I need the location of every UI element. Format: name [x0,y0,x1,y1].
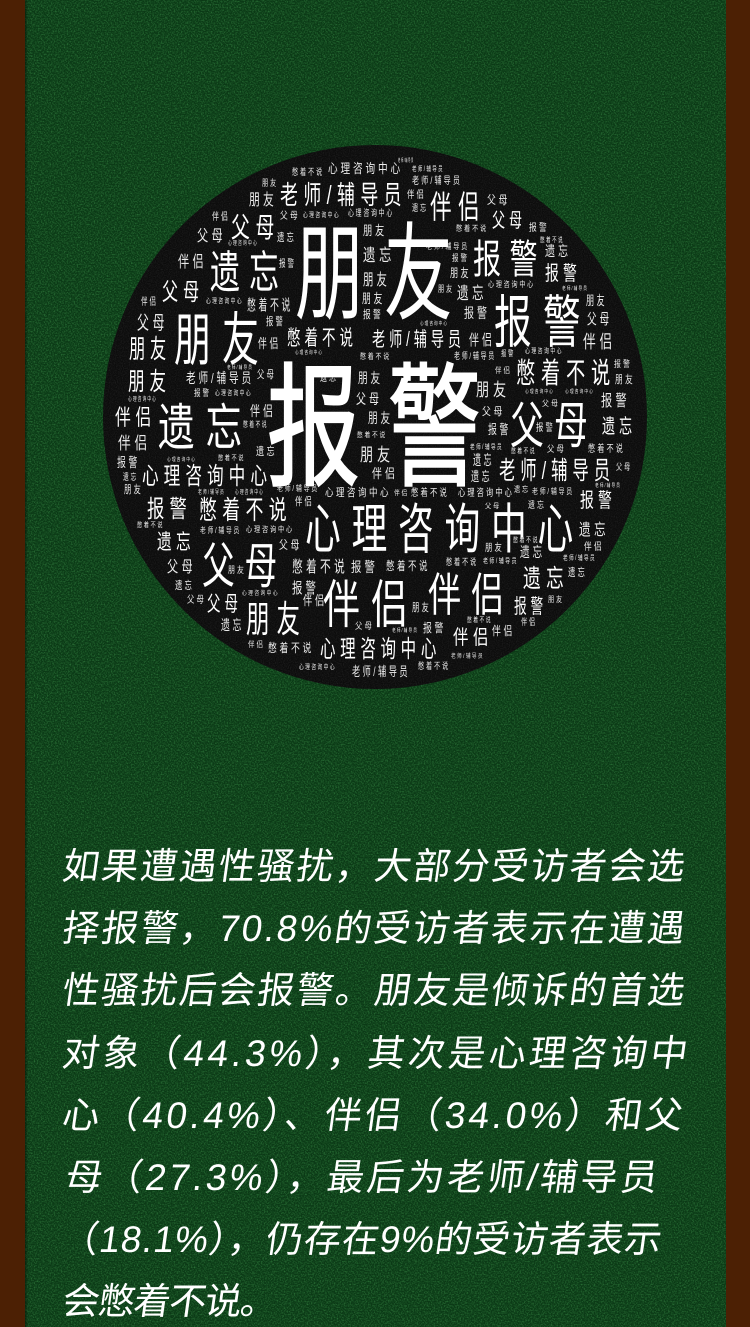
small words: 父母 [280,210,300,222]
small words: 心理咨询中心 [206,296,243,305]
medium words: 憋着不说 [516,357,616,390]
small words: 憋着不说 [218,453,245,462]
small words: 遗忘 [545,243,571,259]
small words: 憋着不说 [137,520,164,529]
small words: 父母 [587,311,612,328]
line 1: 如果遭遇性骚扰，大部分受访者会选 [60,845,688,887]
small words [117,157,635,679]
medium words: 朋友 [129,334,171,364]
small words: 报警 [423,620,446,635]
medium words: 老师/辅导员 [280,180,407,210]
small words: 老师/辅导员 [470,442,503,451]
small words: 憋着不说 [418,660,450,671]
small words: 报警 [464,305,490,321]
small words: 报警 [488,422,511,437]
small words: 心理咨询中心 [295,349,323,356]
small words: 遗忘 [528,499,546,510]
small words: 憋着不说 [247,297,293,314]
small words: 遗忘 [175,578,194,592]
medium words: 朋友 [174,308,270,373]
small words: 报警 [292,580,319,597]
line 8: 会憋着不说。 [60,1280,281,1322]
small words: 伴侣 [372,466,398,481]
small words: 心理咨询中心 [242,589,279,597]
small words: 伴侣 [469,332,495,349]
line 5: 心（40.4%）、伴侣（34.0%）和父 [60,1094,686,1136]
small words: 憋着不说 [588,442,625,455]
medium words: 心理咨询中心 [142,463,272,490]
small words: 憋着不说 [540,235,564,244]
small words: 心理咨询中心 [299,662,336,671]
small words: 伴侣 [118,434,151,453]
small words: 父母 [356,391,382,407]
small words: 憋着不说 [292,558,348,576]
small words: 朋友 [124,482,143,496]
small words: 遗忘 [514,484,530,494]
small words: 心理咨询中心 [228,239,258,247]
small words: 伴侣 [141,295,158,308]
small words: 憋着不说 [243,419,268,429]
small words: 伴侣 [583,332,616,352]
small words: 朋友 [228,564,246,575]
small words: 伴侣 [495,365,512,375]
small words: 遗忘 [412,202,428,213]
small words: 老师/辅导员 [412,164,444,173]
small words: 老师/辅导员 [277,483,319,493]
small words: 憋着不说 [467,615,492,624]
small words: 报警 [601,392,630,410]
small words: 老师/辅导员 [532,486,574,496]
line 2: 择报警，70.8%的受访者表示在遭遇 [60,907,688,949]
small words: 老师/辅导员 [198,488,225,496]
small words: 老师/辅导员 [595,482,621,489]
small words: 伴侣 [492,623,515,638]
medium words: 朋友 [128,368,171,396]
small words: 伴侣 [212,210,230,223]
small words: 老师/辅导员 [451,652,484,660]
medium words [115,180,636,663]
small words: 报警 [529,221,549,234]
small words: 心理咨询中心 [246,524,294,534]
medium words: 父母 [207,593,242,616]
medium words: 心理咨询中心 [320,636,441,663]
small words: 报警 [351,559,378,575]
small words: 遗忘 [221,617,244,633]
small words: 遗忘 [473,452,494,468]
line 7: （18.1%），仍存在9%的受访者表示 [59,1218,665,1260]
medium words: 遗忘 [158,400,253,456]
small words: 父母 [167,559,196,576]
small words: 憋着不说 [292,166,324,177]
small words: 憋着不说 [446,556,478,567]
small words: 报警 [279,257,296,270]
small words: 朋友 [615,372,635,386]
small words: 父母 [279,538,302,552]
small words: 报警 [536,421,555,434]
small words: 遗忘 [568,565,587,579]
small words: 朋友 [450,266,471,280]
line 6: 母（27.3%），最后为老师/辅导员 [63,1156,661,1198]
small words: 遗忘 [579,521,609,539]
small words: 朋友 [368,410,393,426]
medium words: 父母 [492,210,526,232]
medium words: 报警 [580,489,616,512]
small words: 心理咨询中心 [565,388,594,395]
small words: 父母 [355,621,374,631]
small words: 父母 [187,594,206,606]
small words: 心理咨询中心 [525,346,563,355]
small words: 老师/辅导员 [412,174,462,187]
small words: 朋友 [363,271,390,289]
small words: 老师/辅导员 [398,157,414,164]
small words: 遗忘 [320,371,338,384]
small words: 伴侣 [248,639,265,649]
small words: 老师/辅导员 [200,525,241,535]
small words: 遗忘 [123,471,138,482]
small words: 朋友 [586,293,607,308]
small words: 报警 [452,252,469,263]
medium words: 父母 [162,279,204,306]
small words: 遗忘 [457,284,487,303]
medium words: 伴侣 [323,577,419,635]
medium words: 伴侣 [428,569,514,621]
small words: 伴侣 [250,403,276,419]
small words: 朋友 [249,191,277,209]
small words: 父母 [137,313,168,334]
large word: 心理咨询中心: 心理咨询中心 [305,500,584,560]
small words: 报警 [117,455,140,470]
small words: 心理咨询中心 [328,161,403,176]
medium words: 父母 [202,540,287,594]
small words: 憋着不说 [360,351,391,361]
small words: 伴侣 [258,336,281,351]
small words: 伴侣 [521,616,537,627]
medium words: 报警 [545,262,581,285]
medium words: 父母 [510,398,598,454]
small words: 报警 [614,358,632,369]
small words: 伴侣 [584,540,604,553]
small words: 心理咨询中心 [525,388,554,395]
small words: 心理咨询中心 [325,485,391,499]
small words: 心理咨询中心 [420,320,448,327]
small words: 父母 [197,228,226,245]
small words: 心理咨询中心 [235,488,264,496]
large word: 朋友: 朋友 [295,216,473,334]
small words: 朋友 [485,541,504,554]
medium words: 父母 [231,212,280,243]
small words: 遗忘 [256,444,277,458]
small words: 老师/辅导员 [186,370,254,386]
small words: 朋友 [358,370,383,386]
small words: 老师/辅导员 [563,553,596,562]
small words: 心理咨询中心 [303,210,340,219]
small words: 报警 [194,387,211,398]
small words: 心理咨询中心 [458,486,514,499]
medium words: 伴侣 [430,189,486,225]
small words: 朋友 [363,223,387,238]
small words: 伴侣 [407,188,426,201]
medium words: 遗忘 [523,565,569,593]
medium words: 报警 [473,238,546,282]
small words: 憋着不说 [357,430,387,439]
small words: 心理咨询中心 [348,207,394,218]
small words: 老师/辅导员 [352,664,410,679]
medium words: 报警 [494,291,592,355]
medium words: 伴侣 [453,626,493,649]
medium words: 遗忘 [157,531,195,554]
small words: 遗忘 [363,246,395,265]
small words: 朋友 [476,380,510,400]
small words: 老师/辅导员 [392,627,418,634]
small words: 心理咨询中心 [488,279,535,289]
small words: 憋着不说 [513,535,539,544]
small words: 憋着不说 [456,223,488,233]
small words: 报警 [501,348,515,358]
small words: 憋着不说 [386,558,430,573]
small words: 心理咨询中心 [128,395,157,403]
medium words: 老师/辅导员 [372,328,465,351]
small words: 伴侣 [295,494,314,508]
small words: 老师/辅导员 [483,556,518,565]
small words: 老师/辅导员 [227,364,253,371]
small words: 朋友 [362,291,385,306]
medium words: 报警 [147,496,192,523]
line 4: 对象（44.3%），其次是心理咨询中 [60,1032,691,1074]
small words: 老师/辅导员 [454,350,496,361]
medium words: 报警 [514,595,547,618]
small words: 父母 [485,502,501,510]
small words: 遗忘 [471,469,492,484]
small words: 伴侣 [394,488,409,497]
small words: 父母 [547,444,566,454]
small words: 朋友 [262,177,278,188]
medium words: 憋着不说 [199,495,292,525]
small words: 朋友 [438,283,454,294]
small words: 憋着不说 [411,486,449,499]
small words: 憋着不说 [511,446,536,455]
small words: 憋着不说 [268,640,314,655]
line 3: 性骚扰后会报警。朋友是倾诉的首选 [60,969,688,1011]
largest word: 报警: 报警 [267,355,509,504]
medium words: 朋友 [246,599,307,640]
small words: 父母 [482,405,505,418]
small words: 心理咨询中心 [167,456,196,463]
medium words: 伴侣 [115,405,156,430]
small words: 老师/辅导员 [426,241,469,251]
small words: 朋友 [360,445,394,465]
small words: 心理咨询中心 [215,388,252,397]
small words: 父母 [616,462,632,472]
medium words: 遗忘 [210,247,288,298]
medium words: 老师/辅导员 [499,457,615,485]
small words: 老师/辅导员 [562,285,588,292]
small words: 报警 [363,307,383,321]
medium words: 遗忘 [602,415,636,438]
small words: 遗忘 [277,230,296,244]
word cloud disc [103,145,647,689]
small words: 父母 [542,399,560,408]
small words: 朋友 [548,594,564,604]
small words: 报警 [266,314,285,328]
small words: 伴侣 [303,593,327,608]
small words: 遗忘 [520,544,545,560]
small words: 朋友 [412,600,431,614]
medium words: 憋着不说 [287,327,357,350]
small words: 伴侣 [178,253,207,271]
word cloud: response options [115,157,636,679]
small words: 父母 [487,193,510,207]
small words: 父母 [257,368,276,381]
body paragraph [59,845,691,1322]
